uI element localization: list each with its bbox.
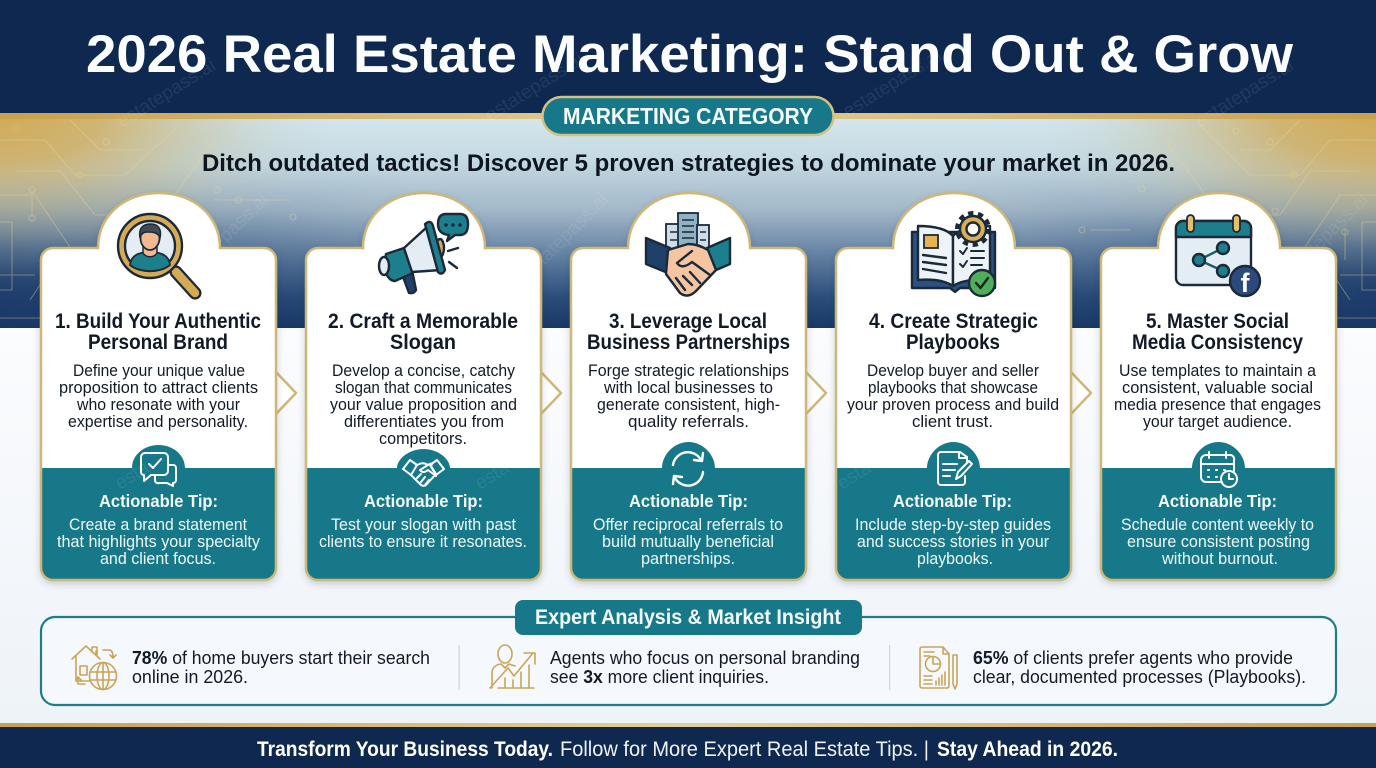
footer band (0, 727, 1376, 768)
icon: calendar with share and Facebook badge: f (1240, 268, 1250, 298)
arrow: card 1 to 2 (275, 371, 296, 415)
insight heading tab: Expert Analysis & Market Insight (535, 606, 841, 629)
icon: handshake outline (403, 460, 444, 486)
watermarks: estatepass.ai (1192, 55, 1298, 132)
heading: Media Consistency (1132, 331, 1303, 354)
watermarks (114, 45, 1373, 284)
tip text: that highlights your specialty (57, 533, 261, 551)
icon: magnifier with person (118, 214, 195, 293)
description (847, 362, 1059, 431)
description: your target audience. (1143, 413, 1292, 431)
tip text: and success stories in your (857, 533, 1049, 551)
tip text: partnerships. (641, 550, 735, 568)
description (330, 362, 517, 448)
description: generate consistent, high- (597, 396, 780, 414)
description: slogan that communicates (335, 379, 512, 397)
arrow: card 3 to 4 (805, 371, 826, 415)
icon: calendar with share and Facebook badge (1176, 215, 1260, 298)
watermarks: estatepass.ai (114, 55, 220, 132)
icon: calendar with clock (1201, 452, 1237, 487)
insight 3 text (973, 647, 1306, 687)
description: Forge strategic relationships (588, 362, 789, 380)
description: Use templates to maintain a (1119, 362, 1317, 380)
footer band: Transform Your Business Today. (257, 738, 553, 761)
footer band: Follow for More Expert Real Estate Tips. | (560, 738, 929, 761)
description: consistent, valuable social (1122, 379, 1313, 397)
heading: 4. Create Strategic (869, 310, 1038, 333)
icon: house and globe (72, 646, 116, 690)
title: 2026 Real Estate Marketing: Stand Out & Grow (86, 25, 1294, 84)
tip text: Schedule content weekly to (1121, 516, 1314, 534)
icon: playbook with gear and check (912, 214, 995, 296)
heading: Playbooks (906, 331, 1000, 354)
watermarks: estatepass.ai (1279, 190, 1373, 284)
arrow: card 4 to 5 (1070, 371, 1091, 415)
icon: sync arrows (673, 452, 703, 486)
description (588, 362, 789, 431)
description: proposition to attract clients (59, 379, 258, 397)
icon: agent with growth chart (490, 645, 535, 688)
heading: Personal Brand (88, 331, 228, 354)
watermarks: estatepass.ai (482, 49, 588, 126)
insight heading tab (515, 600, 862, 635)
heading (587, 310, 790, 354)
description: Develop buyer and seller (867, 362, 1039, 380)
tip text (593, 516, 783, 568)
panel: strategy 2 slogan (306, 193, 541, 580)
panel: strategy 3 partnerships (571, 193, 806, 580)
tip text: Include step-by-step guides (855, 516, 1051, 534)
insight 1 text: 78% of home buyers start their search (132, 647, 430, 668)
heading: Slogan (390, 331, 456, 354)
tip heading: Actionable Tip: (629, 491, 748, 511)
heading: 3. Leverage Local (609, 310, 767, 333)
panel: strategy 1 personal brand (41, 193, 276, 580)
watermarks: estatepass.ai (519, 190, 613, 284)
icon: handshake with buildings (646, 213, 730, 296)
tip heading: Actionable Tip: (1158, 491, 1277, 511)
icon: chat check (141, 453, 176, 486)
tip text (57, 516, 261, 568)
description: with local businesses to (603, 379, 773, 397)
icon: megaphone (379, 214, 468, 293)
tip text: Test your slogan with past (331, 516, 516, 534)
description (1114, 362, 1321, 431)
description: your proven process and build (847, 396, 1059, 414)
tip text: build mutually beneficial (602, 533, 774, 551)
tip heading: Actionable Tip: (99, 491, 218, 511)
category pill: MARKETING CATEGORY (563, 103, 813, 129)
heading: 1. Build Your Authentic (55, 310, 261, 333)
description (59, 362, 258, 431)
tip text (855, 516, 1051, 568)
tip text (319, 516, 527, 551)
description: differentiates you from (344, 413, 504, 431)
insight 3 text: clear, documented processes (Playbooks). (973, 666, 1306, 687)
tip heading: Actionable Tip: (364, 491, 483, 511)
description: who resonate with your (76, 396, 240, 414)
insight 3 text: 65% of clients prefer agents who provide (973, 647, 1293, 668)
panel: expert analysis and market insight (41, 600, 1336, 705)
description: competitors. (379, 430, 467, 448)
watermarks: estatepass.ai (840, 45, 946, 122)
category pill (542, 97, 834, 135)
tip text: clients to ensure it resonates. (319, 533, 527, 551)
description: quality referrals. (628, 413, 749, 431)
insight 1 text: online in 2026. (132, 666, 248, 687)
heading: 2. Craft a Memorable (328, 310, 518, 333)
description: media presence that engages (1114, 396, 1321, 414)
tip text: and client focus. (100, 550, 216, 568)
heading (55, 310, 261, 354)
description: expertise and personality. (68, 413, 248, 431)
panel: strategy 4 playbooks (834, 193, 1071, 580)
tip text: without burnout. (1161, 550, 1278, 568)
subtitle: Ditch outdated tactics! Discover 5 proven strategies to dominate your market in 2026. (202, 150, 1175, 177)
tip text: ensure consistent posting (1127, 533, 1310, 551)
tip text: playbooks. (917, 550, 993, 568)
description: Define your unique value (73, 362, 245, 380)
arrow: card 2 to 3 (540, 371, 561, 415)
icon: document with pencil (938, 452, 972, 485)
background: gradient band with circuit pattern (0, 113, 1376, 328)
insight 1 text (132, 647, 430, 687)
description: Develop a concise, catchy (332, 362, 516, 380)
heading: 5. Master Social (1146, 310, 1289, 333)
insight 2 text (550, 647, 860, 687)
insight 2 text: Agents who focus on personal branding (550, 647, 860, 668)
heading (1132, 310, 1303, 354)
description: client trust. (912, 413, 993, 431)
footer gold divider (0, 723, 1376, 728)
panel: strategy 5 social media (1101, 193, 1336, 580)
description: your value proposition and (330, 396, 517, 414)
page background lower section (0, 320, 1376, 725)
icon: report document (920, 647, 957, 689)
tip text: Create a brand statement (69, 516, 247, 534)
heading (328, 310, 518, 354)
header band (0, 0, 1376, 114)
insight 2 text: see 3x more client inquiries. (550, 666, 769, 687)
panel: strategy 2 slogan: esta (472, 457, 513, 494)
tip text (1121, 516, 1314, 568)
watermarks: estatepass.ai (179, 190, 273, 284)
heading: Business Partnerships (587, 331, 790, 354)
panel: strategy 1 personal brand: esta (112, 457, 153, 494)
heading (869, 310, 1038, 354)
panel: strategy 4 playbooks: esta (834, 457, 875, 494)
tip heading: Actionable Tip: (893, 491, 1012, 511)
gold divider under header (0, 113, 1376, 119)
tip text: Offer reciprocal referrals to (593, 516, 783, 534)
footer band: Stay Ahead in 2026. (937, 738, 1118, 761)
description: playbooks that showcase (868, 379, 1038, 397)
